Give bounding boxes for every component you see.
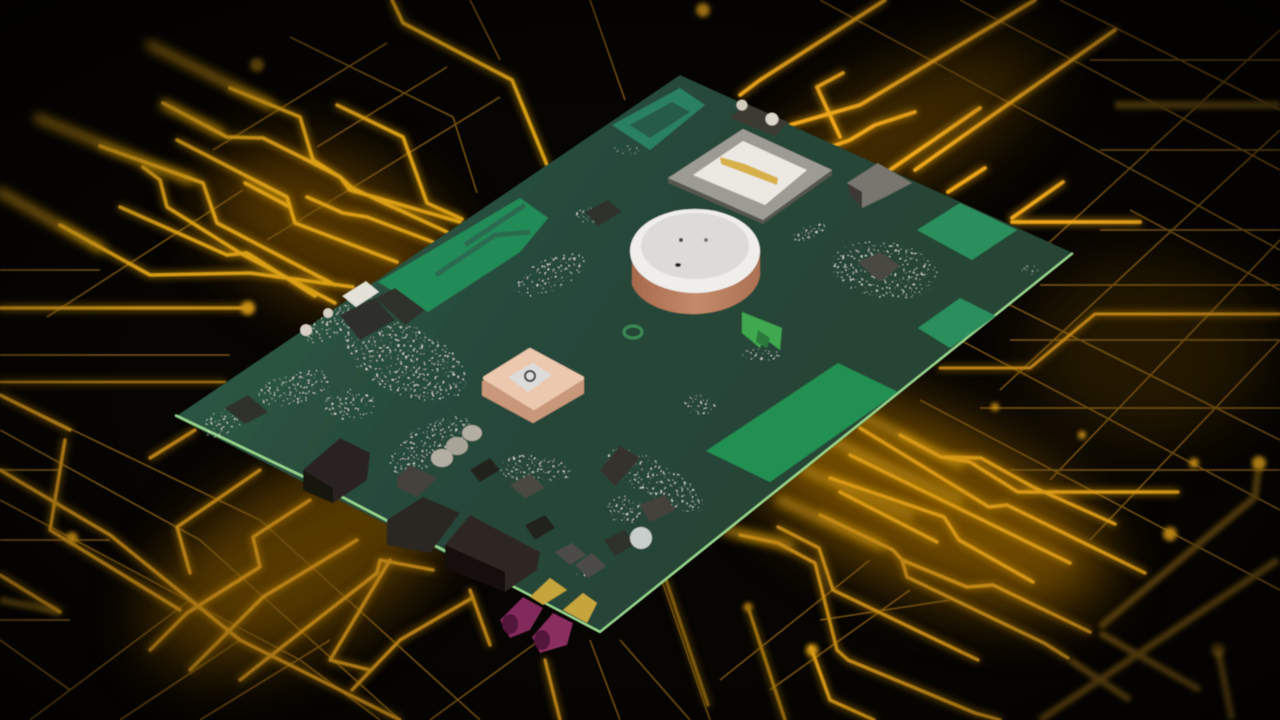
sharp amber traces lower left — [0, 395, 560, 720]
dark chip clusters — [225, 200, 900, 578]
blurred amber trace tails — [0, 45, 960, 545]
sharp amber traces upper left — [0, 0, 547, 382]
component speckle clusters — [198, 145, 1038, 576]
component: small metal connector — [847, 163, 912, 208]
connector: large black housing — [387, 497, 540, 592]
antenna trace — [436, 205, 530, 275]
component: round white ceramic antenna — [630, 209, 760, 314]
chip: heat spreader — [668, 129, 832, 224]
board base — [175, 75, 1073, 632]
sharp amber traces upper right — [740, 0, 1280, 368]
green copper pads — [378, 88, 1017, 482]
component: small green daughter board — [742, 312, 782, 350]
left edge connectors — [300, 281, 395, 340]
pad inner dark region — [630, 102, 690, 138]
component: top connectors — [730, 100, 788, 136]
panel: circuit board — [175, 75, 1073, 653]
board edge highlight — [175, 253, 1073, 632]
connector: left black housing — [303, 438, 370, 503]
sharp amber traces lower right — [666, 428, 1178, 720]
component: square GPS patch antenna — [483, 350, 583, 422]
component: silver capacitors — [431, 425, 652, 549]
connector: FAKRA magenta pair with gold pads — [500, 578, 597, 653]
connector: dark grey block — [397, 465, 437, 497]
via ring — [624, 326, 642, 338]
